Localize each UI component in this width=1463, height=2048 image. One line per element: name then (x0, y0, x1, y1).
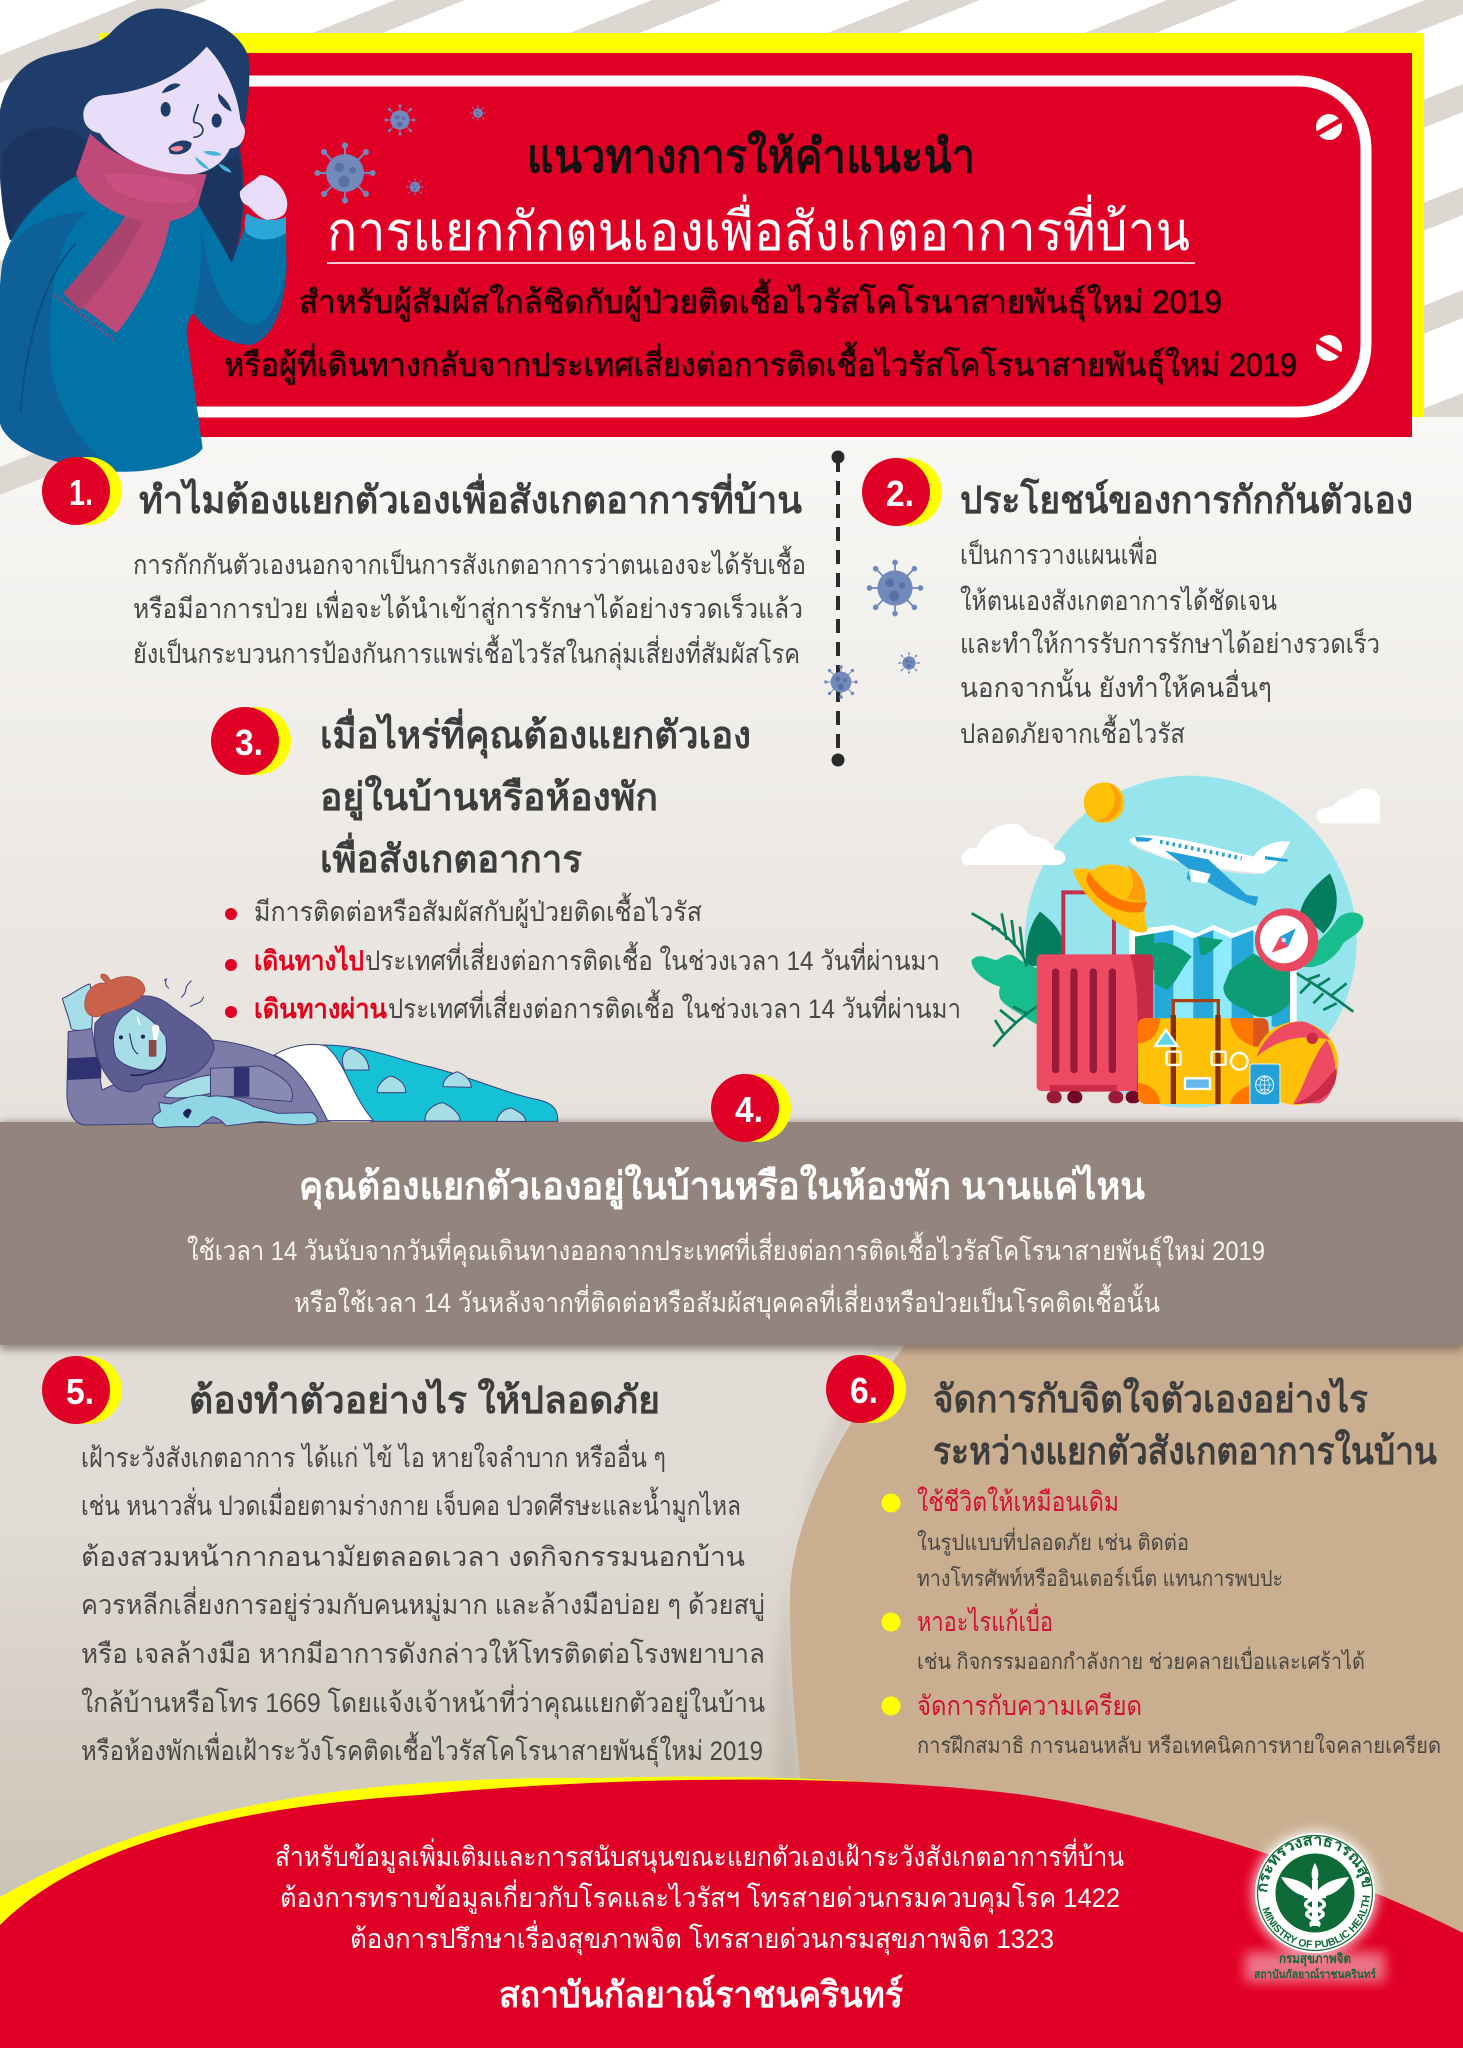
title: หรือผู้ที่เดินทางกลับจากประเทศเสี่ยงต่อการติดเชื้อไวรัสโคโรนาสายพันธุ์ใหม่ 2019 (224, 342, 1297, 385)
section 1 (42, 457, 806, 671)
icon: leaves (972, 873, 1363, 1047)
footer text: สำหรับข้อมูลเพิ่มเติมและการสนับสนุนขณะแยกตัวเองเฝ้าระวังสังเกตอาการที่บ้าน (275, 1838, 1124, 1874)
title: แนวทางการให้คำแนะนำ (527, 129, 975, 182)
bullet list (225, 892, 961, 1024)
icon: passport (1250, 1064, 1280, 1105)
badge 1: 1. (69, 472, 93, 513)
logo: Ministry of Public Health (1236, 1824, 1394, 1990)
footer text: สถาบันกัลยาณ์ราชนครินทร์ (499, 1974, 904, 2015)
body 4: ใช้เวลา 14 วันนับจากวันที่คุณเดินทางออกจากประเทศที่เสี่ยงต่อการติดเชื้อไวรัสโคโรนาสายพันธุ์ใหม่ 2019 (187, 1231, 1265, 1268)
bullet list: เดินทางไป (254, 945, 364, 976)
logo: Ministry of Public Health: กระทรวงสาธารณสุข (1258, 1836, 1372, 1892)
logo: Ministry of Public Health: สถาบันกัลยาณ์ราชนครินทร์ (1254, 1967, 1377, 1981)
body 5: ต้องสวมหน้ากากอนามัยตลอดเวลา งดกิจกรรมนอกบ้าน (81, 1542, 745, 1572)
icon: map (1129, 925, 1297, 1027)
illustration: coughing woman (0, 9, 287, 472)
footer text: ต้องการปรึกษาเรื่องสุขภาพจิต โทรสายด่วนกรมสุขภาพจิต 1323 (350, 1920, 1054, 1956)
icon: section viruses (825, 561, 922, 698)
badge 3: 3. (235, 722, 263, 763)
icon: yellow suitcase (1138, 1001, 1269, 1104)
section 3 (211, 707, 961, 1024)
body 4 (187, 1231, 1265, 1320)
heading 2: ประโยชน์ของการกักกันตัวเอง (960, 477, 1413, 522)
tip 1: ทางโทรศัพท์หรืออินเตอร์เน็ต แทนการพบปะ (917, 1564, 1283, 1591)
icon: compass (1255, 908, 1318, 972)
body 5: ใกล้บ้านหรือโทร 1669 โดยแจ้งเจ้าหน้าที่ว่าคุณแยกตัวอยู่ในบ้าน (81, 1684, 765, 1720)
tip 2: หาอะไรแก้เบื่อ (917, 1603, 1053, 1637)
icon: red suitcase (1037, 892, 1153, 1103)
header banner: yellow and red panels (100, 33, 1424, 437)
body 1: ยังเป็นกระบวนการป้องกันการแพร่เชื้อไวรัสในกลุ่มเสี่ยงที่สัมผัสโรค (133, 634, 800, 671)
title: สำหรับผู้สัมผัสใกล้ชิดกับผู้ป่วยติดเชื้อไวรัสโคโรนาสายพันธุ์ใหม่ 2019 (299, 279, 1222, 322)
body 5: เฝ้าระวังสังเกตอาการ ได้แก่ ไข้ ไอ หายใจลำบาก หรืออื่น ๆ (81, 1439, 666, 1473)
body 2: ปลอดภัยจากเชื้อไวรัส (960, 714, 1185, 749)
body 5: หรือ เจลล้างมือ หากมีอาการดังกล่าวให้โทรติดต่อโรงพยาบาล (81, 1638, 765, 1669)
badge 5 (42, 1356, 122, 1424)
heading 3: เพื่อสังเกตอาการ (320, 832, 583, 881)
icon: top screw (1310, 108, 1348, 146)
body 5: หรือห้องพักเพื่อเฝ้าระวังโรคติดเชื้อไวรัสโคโรนาสายพันธุ์ใหม่ 2019 (81, 1731, 763, 1768)
heading 5: ต้องทำตัวอย่างไร ให้ปลอดภัย (189, 1378, 660, 1422)
body 2: และทำให้การรับการรักษาได้อย่างรวดเร็ว (960, 626, 1380, 659)
bullet list: ประเทศที่เสี่ยงต่อการติดเชื้อ ในช่วงเวลา 14 วันที่ผ่านมา (388, 989, 961, 1024)
body 5 (81, 1439, 765, 1768)
badge 2: 2. (886, 473, 914, 514)
body 2 (960, 536, 1380, 749)
illustration: sick woman lying down (62, 974, 558, 1128)
badge 6 (826, 1355, 906, 1423)
icon: sun (1084, 782, 1124, 823)
heading 3 (320, 708, 751, 881)
body 5: ควรหลีกเลี่ยงการอยู่ร่วมกับคนหมู่มาก และล้างมือบ่อย ๆ ด้วยสบู่ (81, 1586, 765, 1621)
tip 3 (882, 1691, 1441, 1758)
icon: plane (1129, 835, 1290, 906)
bullet list: มีการติดต่อหรือสัมผัสกับผู้ป่วยติดเชื้อไวรัส (254, 892, 702, 928)
badge 4 (711, 1074, 791, 1142)
badge 2 (862, 458, 942, 526)
badge 5: 5. (66, 1371, 94, 1412)
illustration: travel luggage (962, 776, 1380, 1108)
section 4 banner (0, 1122, 1463, 1350)
bullet list: เดินทางผ่าน (254, 994, 388, 1024)
section 6 (826, 1355, 1441, 1758)
white rounded frame (170, 81, 1366, 412)
tip 2 (882, 1603, 1365, 1674)
badge 4: 4. (735, 1089, 763, 1130)
badge 3 (211, 707, 291, 775)
icon: bottom screw (1310, 329, 1348, 367)
heading 3: เมื่อไหร่ที่คุณต้องแยกตัวเอง (320, 708, 751, 759)
icon: hat (1073, 864, 1147, 932)
footer text (275, 1838, 1124, 2015)
body 4: หรือใช้เวลา 14 วันหลังจากที่ติดต่อหรือสัมผัสบุคคลที่เสี่ยงหรือป่วยเป็นโรคติดเชื้อนั้น (294, 1283, 1160, 1320)
heading 6 (933, 1377, 1437, 1473)
tip 1: ในรูปแบบที่ปลอดภัย เช่น ติดต่อ (917, 1527, 1189, 1556)
body 1: การกักกันตัวเองนอกจากเป็นการสังเกตอาการว่าตนเองจะได้รับเชื้อ (133, 545, 806, 580)
logo: Ministry of Public Health: กรมสุขภาพจิต (1279, 1951, 1351, 1967)
dashed divider (832, 450, 844, 766)
footer arc (0, 1777, 1463, 2048)
badge 1 (42, 457, 122, 525)
header viruses (315, 105, 485, 203)
panel: section 6 tan background (778, 1345, 1463, 1950)
body 2: เป็นการวางแผนเพื่อ (960, 536, 1158, 570)
icon: clouds (962, 789, 1380, 865)
heading 4: คุณต้องแยกตัวเองอยู่ในบ้านหรือในห้องพัก นานแค่ไหน (299, 1164, 1145, 1210)
bullet list: ประเทศที่เสี่ยงต่อการติดเชื้อ ในช่วงเวลา 14 วันที่ผ่านมา (365, 941, 940, 976)
tip 1 (882, 1486, 1283, 1591)
body 5: เช่น หนาวสั่น ปวดเมื่อยตามร่างกาย เจ็บคอ ปวดศีรษะและน้ำมูกไหล (81, 1486, 741, 1522)
logo: Ministry of Public Health: MINISTRY OF PUBLIC HEALTH (1262, 1895, 1370, 1948)
heading 6: จัดการกับจิตใจตัวเองอย่างไร (933, 1377, 1369, 1421)
body 1 (133, 545, 806, 671)
title: การแยกกักตนเองเพื่อสังเกตอาการที่บ้าน (327, 194, 1190, 262)
body 2: ให้ตนเองสังเกตอาการได้ชัดเจน (960, 585, 1277, 616)
footer text: ต้องการทราบข้อมูลเกี่ยวกับโรคและไวรัสฯ โทรสายด่วนกรมควบคุมโรค 1422 (280, 1879, 1120, 1915)
badge 6: 6. (850, 1370, 878, 1411)
heading 3: อยู่ในบ้านหรือห้องพัก (320, 775, 658, 821)
tip 2: เช่น กิจกรรมออกกำลังกาย ช่วยคลายเบื่อและเศร้าได้ (917, 1646, 1365, 1674)
heading 1: ทำไมต้องแยกตัวเองเพื่อสังเกตอาการที่บ้าน (139, 473, 802, 522)
tip 3: จัดการกับความเครียด (917, 1691, 1142, 1721)
body 2: นอกจากนั้น ยังทำให้คนอื่นๆ (960, 668, 1272, 703)
title (224, 129, 1297, 385)
tip 1: ใช้ชีวิตให้เหมือนเดิม (917, 1486, 1119, 1517)
section 2 (862, 458, 1413, 749)
section 5 (42, 1356, 765, 1768)
icon: beach ball (1255, 1021, 1338, 1105)
body 1: หรือมีอาการป่วย เพื่อจะได้นำเข้าสู่การรักษาได้อย่างรวดเร็วแล้ว (133, 590, 803, 625)
